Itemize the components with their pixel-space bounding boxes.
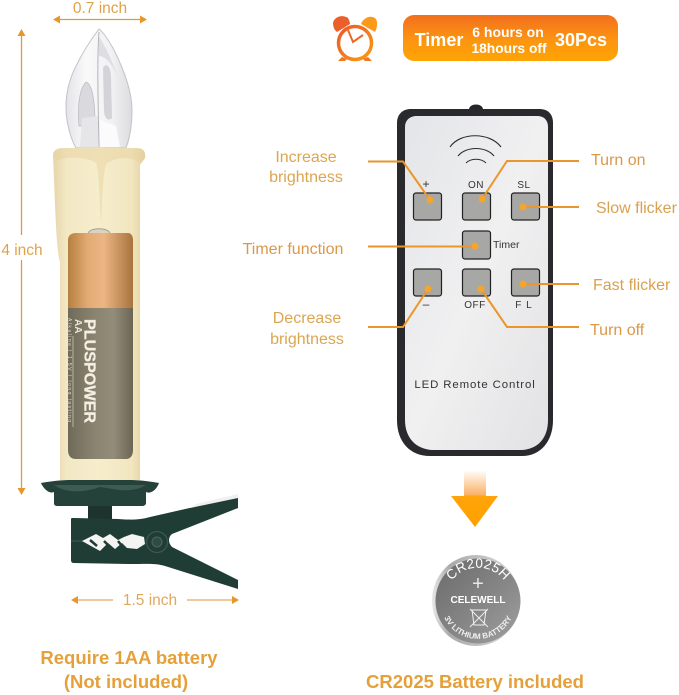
button: off: OFF [464, 300, 486, 311]
button: plus [414, 177, 442, 220]
label: decrease brightness [270, 310, 344, 348]
candle [41, 29, 238, 589]
width dimension: 1.5 inch [71, 592, 239, 609]
remote control [397, 104, 553, 456]
button: fast flicker [512, 269, 540, 311]
icon: signal waves [450, 136, 501, 163]
button: fast flicker: F L [515, 300, 533, 311]
button: timer: Timer [493, 239, 520, 251]
icon: crossed-out bin [470, 609, 488, 627]
button: plus: + [422, 177, 430, 191]
caption: not included: (Not included) [64, 671, 188, 692]
coin battery: CELEWELL [450, 595, 506, 606]
icon: clear flame bulb [66, 29, 132, 148]
banner: timer [403, 15, 618, 61]
banner: timer: 18hours off [471, 41, 547, 56]
caption: require 1AA battery: Require 1AA battery [40, 647, 218, 668]
clip [71, 494, 238, 589]
wax body [53, 148, 145, 482]
coin battery: CR2025H [447, 558, 510, 580]
callout dots [424, 196, 526, 292]
button: on [462, 180, 490, 220]
button: minus: – [423, 297, 430, 311]
banner: timer: Timer [415, 30, 463, 50]
caption: CR2025 battery included: CR2025 Battery included [366, 671, 584, 692]
button: slow flicker: SL [517, 180, 531, 191]
battery: AA: Alkaline | 1.5V | long lasting [66, 318, 72, 422]
label: decrease brightness: brightness [270, 331, 344, 348]
banner: timer: 30Pcs [555, 30, 607, 50]
label: decrease brightness: Decrease [273, 310, 341, 327]
height dimension: 4 inch [1, 29, 43, 495]
label: increase brightness: brightness [269, 169, 343, 186]
width dimension: 0.7 inch: 0.7 inch [73, 0, 127, 17]
label: timer function: Timer function [243, 241, 343, 258]
label: turn on: Turn on [591, 152, 646, 169]
callout lines [368, 161, 579, 327]
label: fast flicker: Fast flicker [593, 277, 671, 294]
width dimension: 1.5 inch: 1.5 inch [123, 592, 177, 609]
battery: AA [66, 229, 133, 459]
button: slow flicker [512, 180, 540, 220]
height dimension: 4 inch: 4 inch [1, 242, 43, 259]
banner: timer: 6 hours on [472, 24, 544, 40]
battery: AA: AA [72, 319, 83, 333]
button: timer [462, 231, 520, 259]
label: turn off: Turn off [590, 322, 645, 339]
width dimension: 0.7 inch [53, 0, 147, 24]
button: minus [414, 269, 442, 311]
coin battery: 3V LITHIUM BATTERY [444, 615, 511, 639]
label: slow flicker: Slow flicker [596, 200, 678, 217]
label: increase brightness: Increase [275, 149, 337, 166]
icon: alarm clock [333, 16, 377, 61]
coin battery [432, 555, 520, 646]
green base [41, 480, 159, 506]
arrow: down to battery [451, 470, 498, 527]
button: on: ON [468, 180, 484, 191]
coin battery: + [472, 573, 484, 595]
button: off [462, 269, 490, 311]
remote label: LED Remote Control [414, 379, 536, 391]
battery: AA: PLUSPOWER [80, 319, 98, 423]
label: increase brightness [269, 149, 343, 186]
